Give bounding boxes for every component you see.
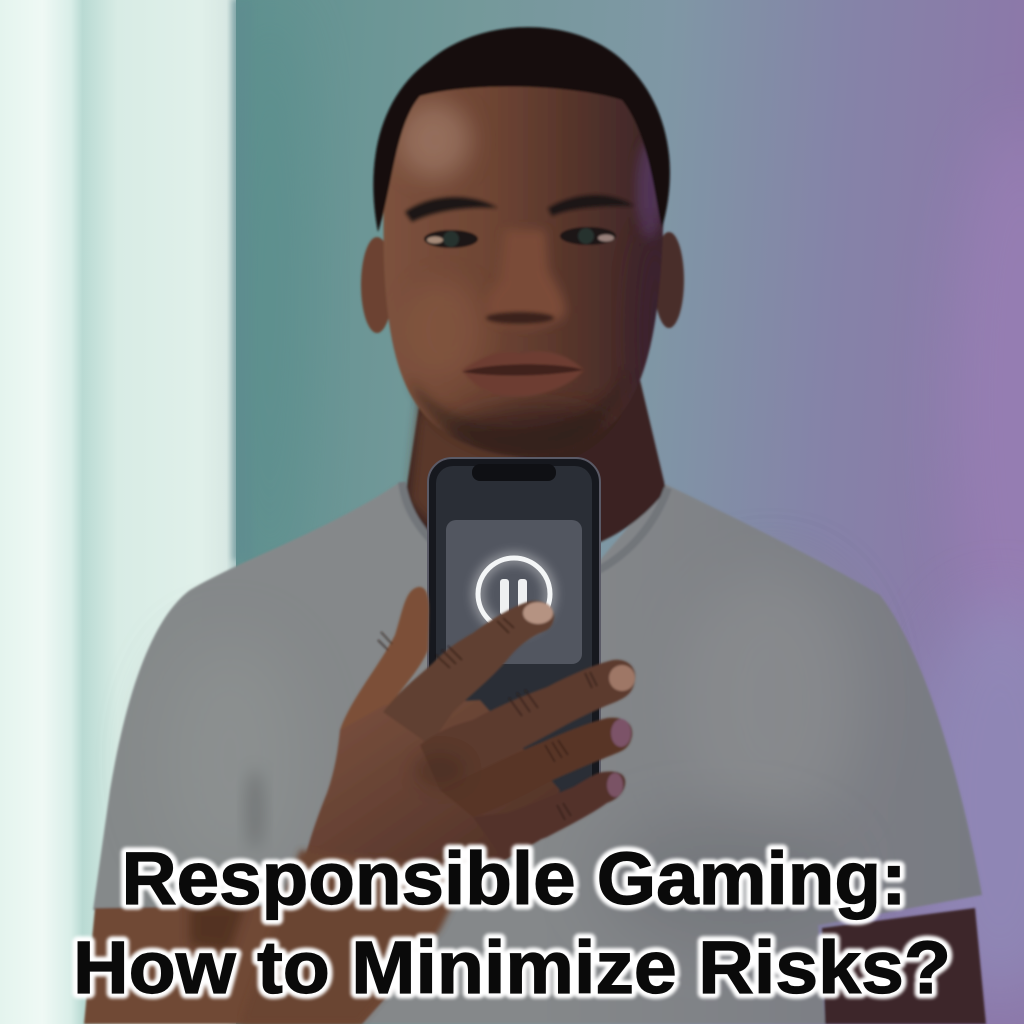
middle finger: [420, 660, 635, 790]
left forearm: [84, 880, 460, 1024]
notch: [472, 464, 556, 481]
mouth: [462, 351, 584, 397]
background: wall gradient: [230, 0, 1024, 1024]
neck: [404, 380, 666, 559]
phone: [428, 458, 600, 808]
thumb: [340, 587, 429, 740]
background: bright window: [0, 0, 252, 1024]
face: [384, 66, 664, 456]
hair: [373, 27, 670, 232]
hand holding phone: [240, 587, 635, 1024]
knuckle shadow: [414, 752, 466, 788]
right forearm: [822, 908, 986, 1024]
eyebrows: [405, 197, 498, 222]
sleeve fold: [246, 770, 264, 850]
t-shirt: [93, 482, 982, 1024]
nose: [485, 230, 565, 327]
ring finger: [440, 718, 632, 817]
pause tile: [446, 520, 582, 664]
eyes: [424, 227, 616, 248]
phone screen: [436, 466, 592, 800]
title: [73, 837, 951, 1009]
little finger: [473, 772, 625, 855]
face shading: [399, 102, 677, 475]
collar: [402, 482, 668, 585]
title line 2: How to Minimize Risks?: [73, 926, 951, 1009]
ears: [361, 237, 393, 333]
title glow: How to Minimize Risks?: [73, 926, 951, 1009]
knuckle creases: [378, 618, 597, 820]
title line 1: Responsible Gaming:: [122, 837, 906, 920]
index finger: [383, 601, 554, 745]
title glow: [73, 837, 951, 1009]
palm: [300, 700, 560, 880]
wrist: [240, 850, 470, 1024]
icon: pause button: [478, 558, 550, 630]
stubble: [410, 370, 628, 456]
title glow: Responsible Gaming:: [122, 837, 906, 920]
